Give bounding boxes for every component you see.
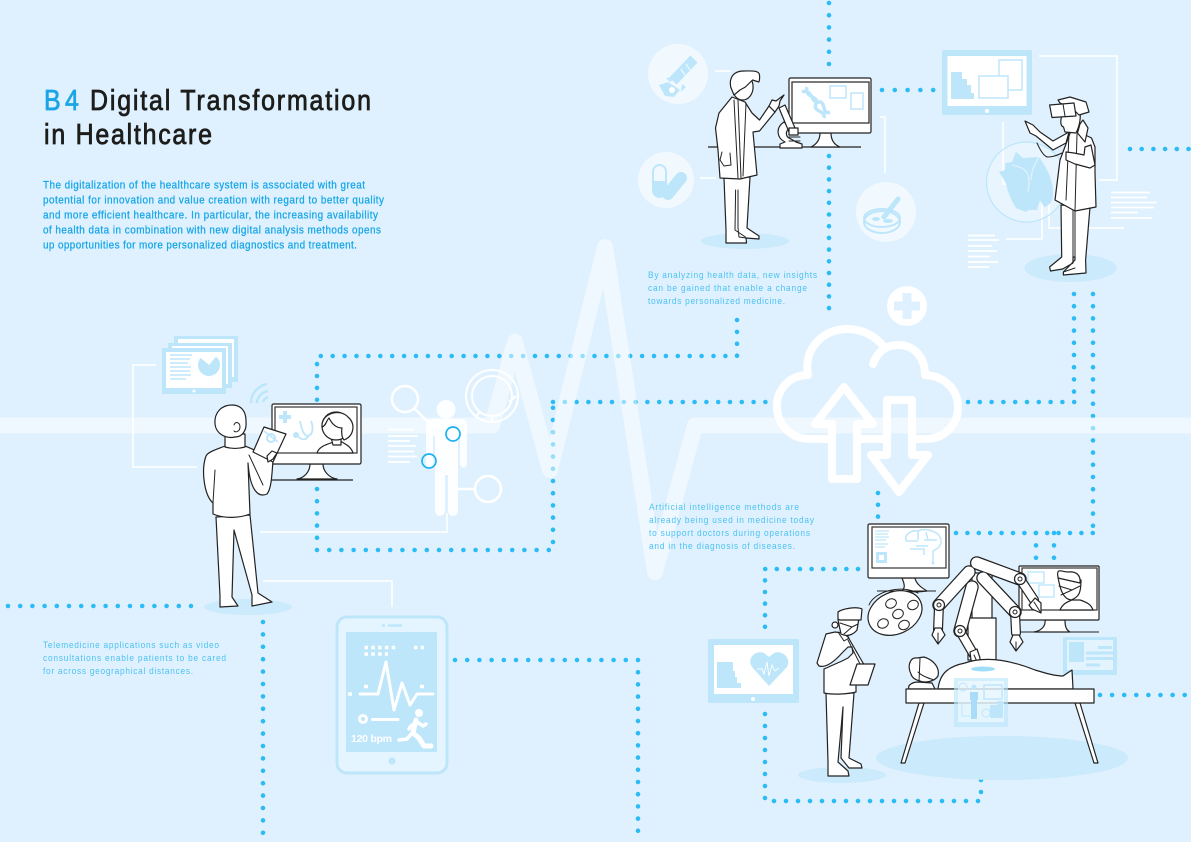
icon: cloud with up and down arrows [777,329,958,492]
intro text: up opportunities for more personalized diagnostics and treatment. [43,240,357,252]
data text lines [388,430,418,462]
title: Digital Transformation [90,84,371,116]
intro text: and more efficient healthcare. In particular, the increasing availability [43,210,379,222]
caption: telemedicine: Telemedicine applications such as video [43,640,219,650]
icon: medical plus [887,286,927,326]
white connector lines [133,365,447,607]
floor shadow [204,599,292,615]
icon: runner [399,709,431,746]
title: B [44,84,61,116]
panel: smartphone heart rate tablet [337,617,447,773]
instrument tips [932,598,1041,666]
caption: telemedicine: consultations enable patients to be cared [43,653,226,663]
icon: microscope circle [648,44,708,104]
wifi arcs [251,384,268,403]
figure [1025,97,1096,275]
title: in Healthcare [44,118,212,150]
surgeon monitor [1019,566,1099,632]
caption: personalized medicine: can be gained that enable a change [648,283,807,293]
panel: body scan icon [388,370,518,516]
AI brain monitor [868,524,949,592]
intro text [43,180,385,252]
intro text: of health data in combination with new digital analysis methods opens [43,225,381,237]
floor shadows [876,736,1128,780]
icon: pills circle [638,152,694,208]
title: 4 [65,84,79,116]
floor shadow [701,233,789,249]
caption: personalized medicine [648,270,817,306]
panel: lab doctor with microscope and DNA screen [638,44,916,249]
icon: petri dish circle [856,182,916,242]
text lines [968,192,1157,267]
monitor with DNA [789,78,871,147]
caption: artificial intelligence: and in the diagnosis of diseases. [649,541,795,551]
background heartbeat line [0,247,1191,572]
tablet with charts [942,50,1032,115]
human body silhouette [426,400,467,516]
intro text: The digitalization of the healthcare system is associated with great [43,180,365,192]
caption: artificial intelligence: already being used in medicine today [649,515,814,525]
heart rate tablet [708,639,799,703]
arm fills [938,563,1034,655]
bpm label: 120 bpm [351,733,392,745]
caption: artificial intelligence: to support doctors during operations [649,528,811,538]
panel: robotic surgery [708,524,1128,783]
heart hologram [986,142,1066,222]
arm outlines [938,563,1034,655]
magnifier circle [392,386,428,422]
white connector lines [1003,56,1124,239]
caption: telemedicine [43,640,226,676]
patient [909,657,1073,689]
white connector lines [700,71,885,178]
documents stack with pie chart [162,336,238,394]
lower circle node [458,476,501,502]
desk line [708,146,861,148]
caption: telemedicine: for across geographical distances. [43,666,193,676]
robot arms [932,563,1041,666]
surgeon figure [817,608,875,776]
title [44,84,371,150]
target ring [466,370,518,422]
patient figure [204,405,286,607]
blue highlight rings [422,427,460,468]
panel: doctor with VR headset and heart hologram [942,50,1157,282]
microscope [778,105,802,148]
white dots row [364,648,424,654]
caption: personalized medicine: By analyzing health data, new insights [648,270,817,280]
ECG curve [360,662,433,710]
monitor with remote doctor [270,404,361,480]
intro text: potential for innovation and value creation with regard to better quality [43,195,385,207]
scientist figure [716,71,784,243]
caption: personalized medicine: towards personalized medicine. [648,296,785,306]
surgical lamp [861,582,929,644]
right data tablet [1063,637,1117,675]
panel: telemedicine patient with monitor [133,336,447,615]
progress slider [360,716,398,722]
operating table [901,689,1098,763]
caption: artificial intelligence: Artificial intelligence methods are [649,502,799,512]
body scan tablet overlay [954,678,1008,727]
floor shadow [1024,254,1116,282]
caption: artificial intelligence [649,502,814,551]
